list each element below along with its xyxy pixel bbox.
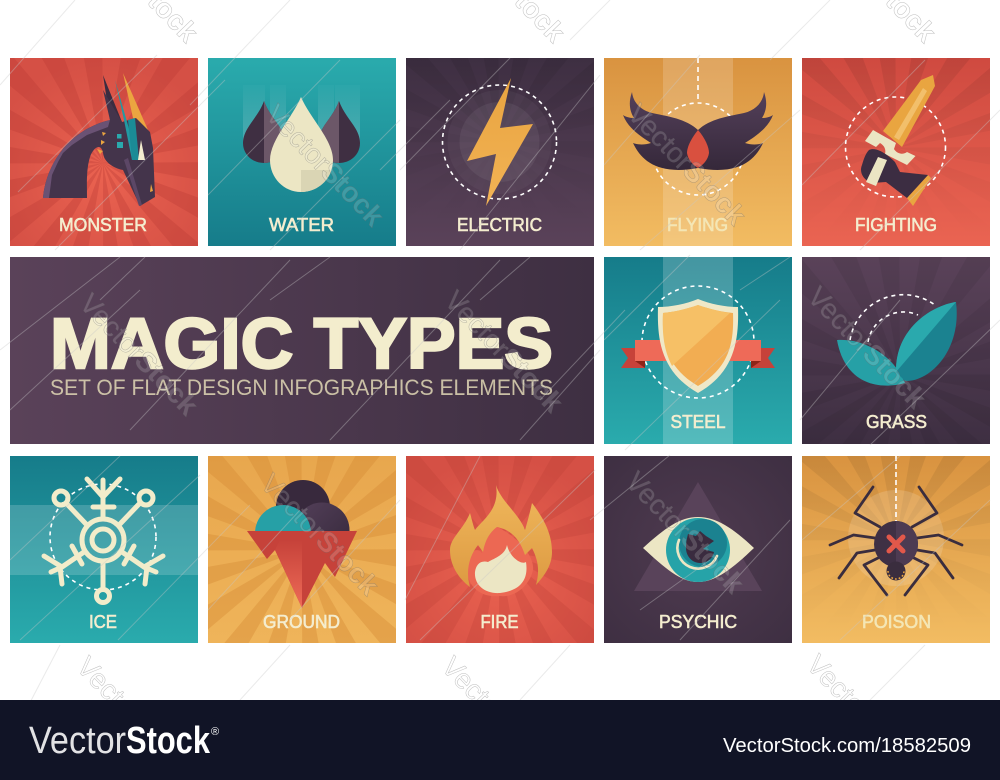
footer id: VectorStock.com/18582509: [723, 735, 971, 757]
label: FLYING: [667, 215, 728, 235]
label: GROUND: [263, 612, 340, 632]
panel: fighting: [802, 58, 990, 246]
watermarks: VectorStock: [620, 466, 750, 599]
label: FIRE: [480, 612, 518, 632]
panel: monster: [10, 58, 198, 253]
icon: wings: [623, 92, 773, 170]
label: WATER: [269, 215, 334, 235]
icon: sword in fist: [861, 75, 935, 206]
watermarks: VectorStock: [439, 285, 569, 418]
icon: water drops: [243, 97, 360, 192]
watermarks: VectorStock: [74, 288, 204, 421]
icon: flame: [450, 485, 552, 596]
icon: leaves: [837, 302, 957, 386]
title: MAGIC TYPES: [50, 305, 553, 384]
watermarks: VectorStock: [622, 98, 752, 231]
label: FIGHTING: [855, 215, 937, 235]
footer logo: VectorStock: [29, 720, 211, 762]
label: PSYCHIC: [659, 612, 737, 632]
panel: electric: [406, 52, 594, 246]
icon: eye: [643, 517, 754, 582]
icon: spider: [830, 487, 962, 595]
icon: lightning bolt: [467, 78, 533, 206]
panel: poison: [802, 450, 990, 643]
footer bar: [0, 700, 1000, 780]
registered mark: ®: [211, 726, 219, 738]
icon: monster: [43, 73, 155, 206]
icon: floating island: [247, 480, 357, 608]
label: POISON: [862, 612, 931, 632]
watermarks: VectorStock: [801, 649, 931, 780]
panel: ice: [10, 456, 198, 643]
watermarks: VectorStock: [255, 468, 385, 601]
panel: steel: [604, 257, 792, 444]
panel: fire: [406, 456, 594, 643]
label: MONSTER: [59, 215, 147, 235]
label: ICE: [89, 612, 117, 632]
icon: shield with ribbon: [621, 299, 775, 393]
panel: flying: [604, 58, 792, 246]
label: STEEL: [670, 412, 726, 432]
watermarks: VectorStock: [260, 99, 390, 232]
watermarks: VectorStock: [802, 281, 932, 414]
panel: ground: [208, 456, 396, 643]
panel: water: [208, 58, 396, 246]
panel: grass: [802, 257, 990, 444]
icon: snowflake: [44, 479, 163, 602]
panel: title banner: [10, 257, 594, 444]
panel: psychic: [604, 456, 792, 643]
label: ELECTRIC: [457, 215, 542, 235]
label: GRASS: [866, 412, 927, 432]
subtitle: SET OF FLAT DESIGN INFOGRAPHICS ELEMENTS: [50, 375, 553, 400]
